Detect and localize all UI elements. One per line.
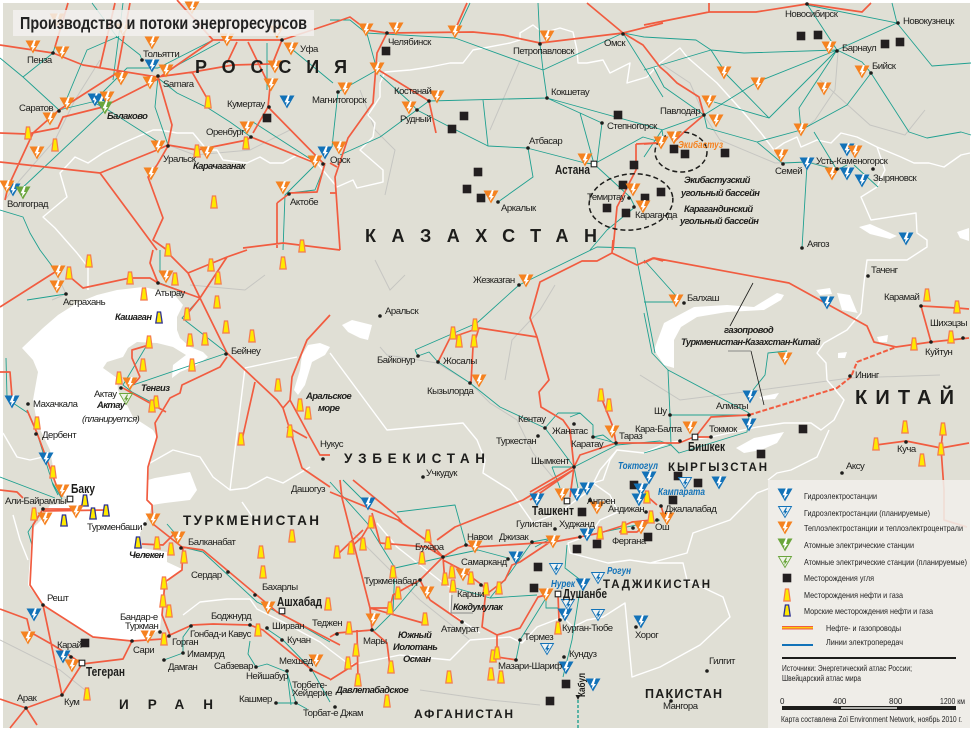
city labels: Байконур xyxy=(377,355,415,366)
city labels: Саратов xyxy=(19,103,53,114)
city labels: Мары xyxy=(363,636,387,647)
nuclear power station markers xyxy=(16,101,112,200)
legend divider and sources: Швейцарский атлас мира xyxy=(782,674,861,683)
facility names in bold italic: Экибастузский xyxy=(684,174,751,185)
city labels: Ош xyxy=(655,522,670,533)
city labels: Кучан xyxy=(287,635,311,646)
city labels: Атырау xyxy=(155,288,186,299)
city labels: Новокузнецк xyxy=(903,16,955,27)
city labels: Худжанд xyxy=(559,519,595,530)
legend: hydro xyxy=(778,488,877,502)
city labels: Туркменабад xyxy=(364,576,418,587)
legend divider and sources xyxy=(782,657,956,683)
country labels: УЗБЕКИСТАН xyxy=(344,451,485,466)
city labels: Кара-Балта xyxy=(635,424,683,435)
facility names in bold italic: Карагандинский xyxy=(684,203,753,214)
city labels: Рудный xyxy=(400,114,431,125)
facility names in bold italic: Осман xyxy=(403,653,431,664)
city labels: Боджнурд xyxy=(211,611,252,622)
capital city labels: Баку xyxy=(71,481,96,496)
Kabul direction label xyxy=(576,673,588,700)
facility names in bold italic: Челекен xyxy=(129,549,165,560)
city labels: Токмок xyxy=(709,424,738,435)
country labels: КАЗАХСТАН xyxy=(365,226,597,246)
city labels: Ширван xyxy=(272,621,304,632)
city labels: Самарканд xyxy=(461,557,508,568)
legend: hydro: Гидроэлектростанции xyxy=(804,491,877,501)
gas pipeline leader lines xyxy=(730,283,764,405)
city labels: Гулистан xyxy=(516,519,552,530)
title xyxy=(13,10,314,36)
city labels: Алматы xyxy=(716,401,749,412)
city labels: Аксу xyxy=(846,461,865,472)
city labels: Термез xyxy=(524,632,554,643)
country labels: ИРАН xyxy=(119,697,213,712)
legend: power lines: Линии электропередач xyxy=(826,637,903,647)
city labels: Андижан xyxy=(608,504,644,515)
legend panel xyxy=(768,480,970,728)
city labels: Аягоз xyxy=(807,239,830,250)
city labels: Тараз xyxy=(619,431,643,442)
city labels: Samara xyxy=(163,79,195,90)
city labels: Аральск xyxy=(385,306,419,317)
city labels: Сабзевар xyxy=(214,661,253,672)
city labels: Атбасар xyxy=(529,136,562,147)
city labels: Каратау xyxy=(571,439,604,450)
city labels: Атамурат xyxy=(441,624,480,635)
city labels: Усть-Каменогорск xyxy=(816,156,889,167)
city labels: Туркменбаши xyxy=(87,522,142,533)
city labels: Омск xyxy=(604,38,626,49)
city labels: Шу xyxy=(654,406,667,417)
hydro plant names in blue italic: Рогун xyxy=(607,565,631,577)
city labels: Имамруд xyxy=(187,649,225,660)
capital city labels: Душанбе xyxy=(563,586,607,601)
hydro plant names in blue italic: Нурек xyxy=(551,578,576,590)
facility names in bold italic: Балаково xyxy=(107,110,148,121)
country labels: ТАДЖИКИСТАН xyxy=(603,579,710,591)
Ekibastuz thermal plant label: Экибастуз xyxy=(678,139,723,151)
Karaganda coal basin outline xyxy=(586,170,676,234)
facility names in bold italic: газопровод xyxy=(724,324,774,335)
legend: oil and gas xyxy=(784,589,903,601)
city labels: Челябинск xyxy=(388,37,432,48)
facility names in bold italic: Тенгиз xyxy=(141,382,170,393)
facility names in bold italic: Аральское xyxy=(305,390,352,401)
facility names in bold italic: (планируется) xyxy=(82,413,140,424)
city labels: Степногорск xyxy=(607,121,658,132)
city labels: Балхаш xyxy=(687,293,720,304)
city labels: Кум xyxy=(64,697,79,708)
city labels: Жезказган xyxy=(473,275,515,286)
capital city labels: Ташкент xyxy=(532,503,574,518)
city labels: Кундуз xyxy=(569,649,598,660)
legend: coal xyxy=(783,573,874,583)
facility names in bold italic: Карачаганак xyxy=(193,160,247,171)
scale bar: 0 xyxy=(780,697,785,706)
Ekibastuz coal basin outline xyxy=(655,132,707,172)
city labels: Мазари-Шариф xyxy=(498,661,562,672)
city labels: Астрахань xyxy=(63,297,106,308)
city labels: Караганда xyxy=(635,210,678,221)
city labels: Новосибирск xyxy=(785,9,839,20)
city labels: Магнитогорск xyxy=(312,95,367,106)
city labels: Карши xyxy=(457,589,484,600)
legend: coal: Месторождения угля xyxy=(804,573,874,583)
city labels: Дашогуз xyxy=(291,484,326,495)
city labels: Шихэцзы xyxy=(930,318,968,329)
city labels: Торбете- xyxy=(292,680,327,691)
scale bar: 800 xyxy=(889,697,903,706)
city labels: Фергана xyxy=(612,536,647,547)
city labels: Али-Байрамлы xyxy=(5,496,67,507)
city labels: Гилгит xyxy=(709,656,736,667)
legend: pipelines xyxy=(782,623,901,633)
facility names in bold italic: Кокдумулак xyxy=(453,601,504,612)
city labels: Джалалабад xyxy=(665,504,717,515)
country labels: КЫРГЫЗСТАН xyxy=(668,462,767,474)
facility names in bold italic: Туркменистан-Казахстан-Китай xyxy=(681,336,821,347)
city labels: Волгоград xyxy=(7,199,49,210)
scale bar xyxy=(780,697,965,710)
city labels: Семей xyxy=(775,166,802,177)
city labels: Карай xyxy=(57,640,82,651)
legend: offshore oil and gas: Морские месторождения нефти и газа xyxy=(804,606,933,616)
city labels: Барнаул xyxy=(842,43,876,54)
legend: planned hydro xyxy=(778,506,930,518)
city labels: Жанатас xyxy=(552,426,588,437)
city labels: Арак xyxy=(17,693,38,704)
city labels: Костанай xyxy=(394,86,431,97)
city labels: Курган-Тюбе xyxy=(562,623,613,634)
city labels: Бахарлы xyxy=(262,582,298,593)
city labels: Кызылорда xyxy=(427,386,475,397)
facility names in bold italic xyxy=(82,110,821,695)
country labels xyxy=(119,57,954,721)
city labels: Куча xyxy=(897,444,917,455)
city labels: Кашмер xyxy=(239,694,272,705)
coal deposit markers xyxy=(81,31,904,705)
city labels: Бийск xyxy=(872,61,897,72)
city labels: Пенза xyxy=(27,55,53,66)
scale bar: 400 xyxy=(833,697,847,706)
legend: oil and gas: Месторождения нефти и газа xyxy=(804,590,903,600)
city labels: Мехшед xyxy=(279,656,313,667)
city labels: Темиртау xyxy=(587,192,626,203)
capital city labels: Бишкек xyxy=(688,439,725,454)
city labels: Бухара xyxy=(415,542,445,553)
scale bar: 1200 км xyxy=(940,697,965,706)
facility names in bold italic: Актау xyxy=(96,399,126,410)
water bodies: Caspian, Aral, Balkhash and other lakes xyxy=(22,224,969,641)
city labels: Павлодар xyxy=(660,106,700,117)
city labels: Туркестан xyxy=(496,436,536,447)
planned nuclear power station marker xyxy=(120,394,132,404)
city labels: Тольятти xyxy=(143,49,179,60)
city labels: Махачкала xyxy=(33,399,79,410)
facility names in bold italic: Иолотань xyxy=(393,641,438,652)
facility names in bold italic: море xyxy=(318,402,340,413)
facility names in bold italic: угольный бассейн xyxy=(680,187,760,198)
city labels: Петропавловск xyxy=(513,46,575,57)
city labels: Сари xyxy=(133,645,154,656)
city labels: Сердар xyxy=(191,570,222,581)
city labels: Учкудук xyxy=(426,468,458,479)
city labels: Кентау xyxy=(518,414,546,425)
city labels: Таченг xyxy=(871,265,899,276)
country labels: АФГАНИСТАН xyxy=(414,707,513,721)
legend: thermal xyxy=(778,521,963,534)
city labels: Навои xyxy=(467,532,493,543)
planned hydro power station markers xyxy=(540,478,692,654)
city labels: Хейдерие xyxy=(292,688,332,699)
city labels: Горган xyxy=(172,637,198,648)
city labels: Решт xyxy=(47,593,70,604)
capital city markers xyxy=(67,161,698,666)
capital city labels: Астана xyxy=(555,162,591,177)
city labels: Туркман xyxy=(125,621,158,632)
Kabul direction label: Кабул xyxy=(576,673,588,697)
dashed power line to Kabul xyxy=(577,700,579,728)
legend: nuclear: Атомные электрические станции xyxy=(804,540,914,550)
capital city labels xyxy=(71,162,725,679)
legend: nuclear xyxy=(778,538,914,552)
city labels: Джизак xyxy=(499,532,530,543)
city labels: Уфа xyxy=(300,44,319,55)
city labels: Гонбад-и Кавус xyxy=(190,629,252,640)
legend: planned hydro: Гидроэлектростанции (планируемые) xyxy=(804,508,930,518)
hydro plant names in blue italic: Токтогул xyxy=(618,460,658,472)
city labels: Карамай xyxy=(884,292,920,303)
city labels: Уральск xyxy=(163,154,197,165)
country labels: РОССИЯ xyxy=(195,57,347,77)
city labels: Хорог xyxy=(635,630,659,641)
city labels: Кокшетау xyxy=(551,87,590,98)
city labels: Оренбург xyxy=(206,127,245,138)
city labels: Нукус xyxy=(320,439,344,450)
city labels: Балканабат xyxy=(188,537,237,548)
city labels: Зыряновск xyxy=(873,173,918,184)
offshore oil and gas field markers xyxy=(61,312,162,548)
legend divider and sources: Источники: Энергетический атлас России; xyxy=(782,664,912,673)
legend: offshore oil and gas xyxy=(784,605,933,616)
dashed pipeline Turkmenistan-Kazakhstan-China xyxy=(749,347,896,415)
city labels: Нейшабур xyxy=(246,671,288,682)
hydro plant names in blue italic xyxy=(551,460,705,590)
city labels: Актобе xyxy=(290,197,318,208)
facility names in bold italic: Кашаган xyxy=(115,311,152,322)
city labels: Аркалык xyxy=(501,203,537,214)
city labels: Кумертау xyxy=(227,99,265,110)
city labels: Актау xyxy=(94,389,117,400)
legend: pipelines: Нефте- и газопроводы xyxy=(826,623,901,633)
country labels: ПАКИСТАН xyxy=(645,687,722,701)
facility names in bold italic: Давлетабадское xyxy=(335,684,408,695)
capital city labels: Ашхабад xyxy=(277,594,323,609)
city labels: Мангора xyxy=(663,701,699,712)
country labels: КИТАЙ xyxy=(855,385,954,409)
country labels: ТУРКМЕНИСТАН xyxy=(183,513,319,528)
city labels: Бандар-е xyxy=(120,612,158,623)
city labels: Орск xyxy=(330,155,351,166)
city labels: Жосалы xyxy=(443,356,477,367)
city labels: Куйтун xyxy=(925,347,953,358)
city labels: Ангрен xyxy=(587,496,615,507)
facility names in bold italic: Южный xyxy=(398,629,432,640)
city labels: Дамган xyxy=(168,662,198,673)
capital city labels: Тегеран xyxy=(86,664,125,679)
hydro plant names in blue italic: Кампарата xyxy=(658,486,705,498)
city labels: Дербент xyxy=(42,430,77,441)
facility names in bold italic: угольный бассейн xyxy=(679,215,759,226)
title: Производство и потоки энергоресурсов xyxy=(20,13,307,33)
legend: power lines xyxy=(782,637,903,647)
city labels: Торбат-е Джам xyxy=(303,708,363,719)
city labels: Бейнеу xyxy=(231,346,261,357)
city labels: Ининг xyxy=(855,370,880,381)
city labels: Шымкент xyxy=(531,456,570,467)
city labels: Теджен xyxy=(312,618,342,629)
